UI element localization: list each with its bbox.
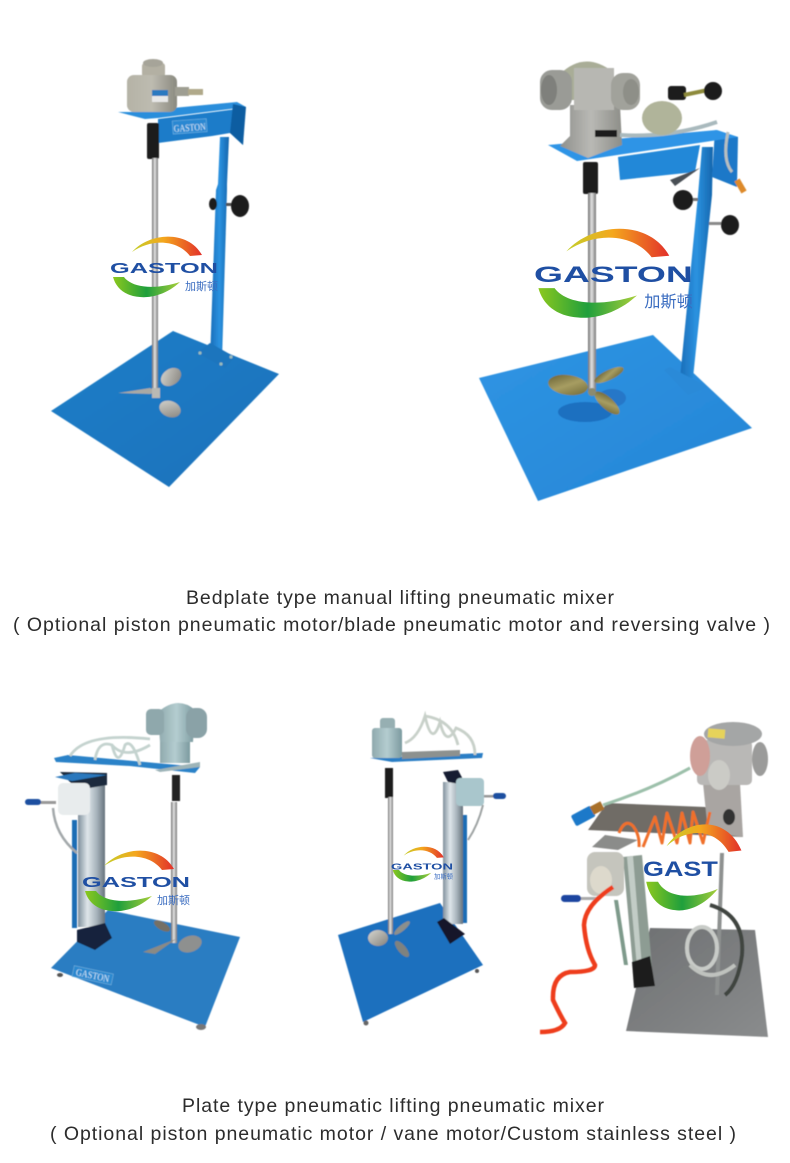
piston motor [372, 718, 402, 758]
valve and handle [456, 778, 506, 840]
logo watermark 1 [110, 237, 218, 297]
mixer photo: plate type, piston motor [338, 716, 506, 1026]
blade motor [146, 703, 207, 772]
upper plate [588, 803, 743, 837]
caption: bedplate type: ( Optional piston pneumatic motor/blade pneumatic motor and reversing valve ) [13, 614, 770, 636]
air cylinder [437, 770, 467, 944]
logo watermark 4 [391, 847, 454, 882]
valve and handle [25, 783, 90, 853]
orange coil hose [619, 812, 710, 847]
base plate [51, 331, 279, 487]
impeller [368, 919, 412, 959]
lifting column [197, 137, 249, 368]
air tubes [70, 737, 150, 765]
logo watermark 3: 加斯顿 [157, 893, 190, 907]
orange supply hose [540, 887, 613, 1032]
helical ribbon impeller [687, 905, 742, 995]
column [664, 147, 739, 395]
air cylinder [60, 772, 112, 950]
impeller [118, 364, 185, 420]
rod [614, 900, 628, 965]
caption: bedplate type: Bedplate type manual lifting pneumatic mixer [186, 587, 614, 609]
base plate [51, 910, 240, 1027]
air motor [127, 59, 203, 112]
propeller shadow [558, 402, 612, 422]
logo watermark 2: GASTON [534, 262, 693, 287]
sleeve and shaft [171, 775, 180, 943]
caption: bedplate type [13, 587, 770, 636]
lower plate [592, 835, 638, 850]
bracket arm: GASTON [173, 122, 206, 135]
base plate [479, 335, 752, 501]
caption: plate type: Plate type pneumatic lifting pneumatic mixer [182, 1095, 604, 1117]
logo watermark 3: GASTON [82, 874, 190, 891]
blade air motor [540, 61, 640, 158]
brass propeller [547, 364, 626, 418]
logo watermark 1: 加斯顿 [185, 279, 218, 293]
sleeve and shaft [583, 162, 598, 393]
logo watermark 1: GASTON [110, 260, 218, 277]
caption: plate type: ( Optional piston pneumatic motor / vane motor/Custom stainless steel ) [50, 1123, 736, 1145]
logo watermark 2: 加斯顿 [644, 293, 693, 311]
logo watermark 5: GAST [643, 857, 719, 881]
mixer photo: stainless steel custom [540, 722, 768, 1037]
logo watermark 4: GASTON [391, 861, 453, 871]
logo watermark 3 [82, 851, 190, 911]
reversing valve and hose [620, 82, 722, 135]
motor [690, 722, 768, 837]
green air hose [603, 768, 690, 805]
sleeve and shaft [385, 768, 393, 934]
mixer photo: plate type, blade motor [25, 703, 240, 1030]
valve and handle [561, 852, 624, 902]
bracket arm [118, 102, 246, 145]
muffler [571, 800, 605, 826]
logo watermark 5 [643, 824, 741, 910]
steel base plate [626, 928, 768, 1037]
logo watermark 2 [534, 229, 693, 318]
arm [370, 753, 483, 762]
air cylinder [623, 855, 655, 988]
caption: plate type [50, 1095, 736, 1145]
mixer photo: bedplate manual lifting, blade motor with reversing valve [479, 61, 752, 501]
top plates [54, 755, 200, 773]
base label: GASTON [75, 967, 110, 985]
shaft [715, 853, 724, 995]
sleeve and shaft [147, 123, 159, 394]
base plate [338, 903, 483, 1022]
mixer photo: bedplate manual lifting, piston motor [51, 59, 279, 487]
bracket [548, 130, 744, 192]
air tubes [405, 716, 475, 755]
impeller [143, 918, 204, 955]
logo watermark 4: 加斯顿 [434, 872, 454, 881]
